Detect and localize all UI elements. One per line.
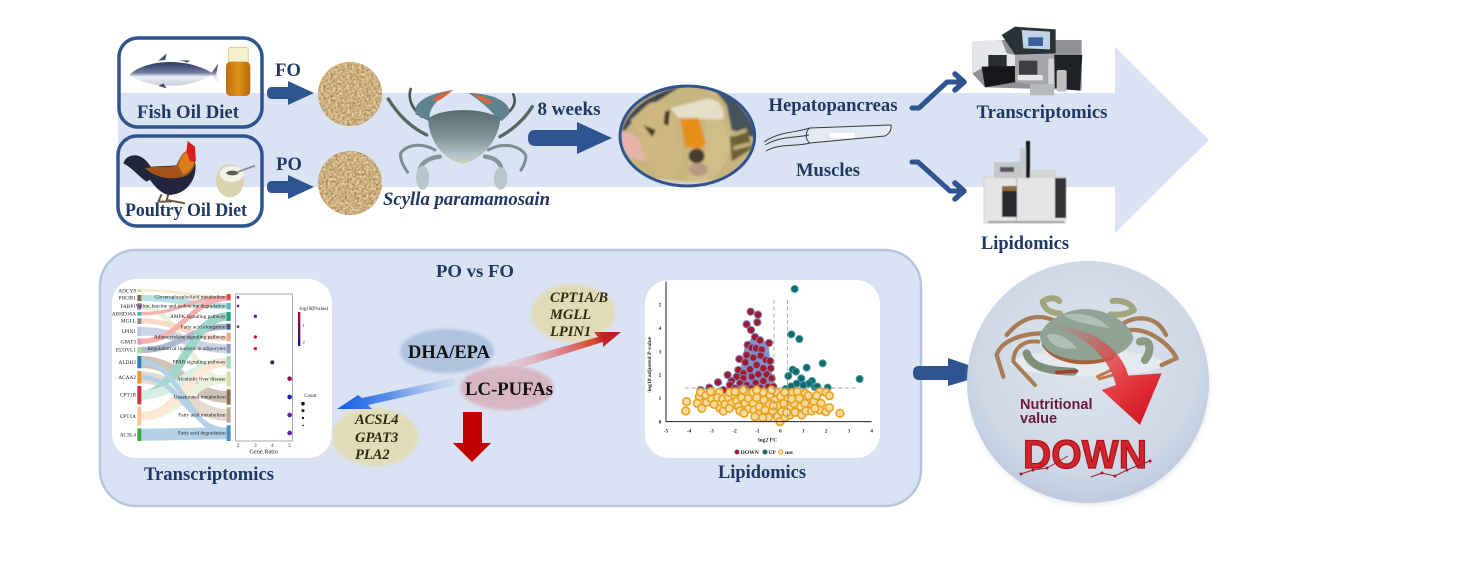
chart: sankey diagram: PPAR signaling pathway — [173, 360, 226, 366]
chart: volcano plot: -5 — [664, 429, 669, 434]
legend: volcano categories: UP — [768, 450, 776, 456]
icon: mass spectrometer — [984, 141, 1066, 223]
label: DOWN: DOWN — [1023, 433, 1147, 477]
arrow: to transcriptomics — [912, 74, 964, 108]
ellipse: down-regulated genes — [332, 408, 418, 466]
chart: sankey diagram: Fatty acid elongation — [181, 324, 226, 330]
legend: volcano categories — [735, 450, 793, 456]
chart: volcano plot: 4 — [870, 429, 873, 434]
chart: volcano plot: -1 — [755, 429, 760, 434]
chart: gene ratio dot plot: 5 — [288, 444, 291, 449]
decorative trend line — [1020, 456, 1152, 478]
chart: volcano plot: -2 — [733, 429, 737, 434]
chart: volcano plot: 4 — [659, 327, 662, 332]
chart: sankey diagram: ACAA2 — [118, 375, 136, 381]
chart: volcano plot: 0 — [779, 429, 782, 434]
icon: fish — [129, 53, 218, 88]
label: transcriptomics: Transcriptomics — [976, 102, 1108, 123]
big background arrow — [118, 47, 1209, 233]
chart: volcano plot: 3 — [659, 350, 662, 355]
label: fish oil diet: Fish Oil Diet — [137, 102, 240, 123]
ellipse: DHA/EPA: DHA/EPA — [408, 342, 490, 363]
chart: sankey diagram: Glycerophospholipid metabolism — [154, 295, 227, 301]
label: nutritional value: value — [1020, 411, 1057, 427]
chart: gene ratio dot plot: 1 — [303, 323, 305, 328]
arrow: to nutritional value result — [913, 358, 992, 386]
ellipse: down-regulated genes: ACSL4 — [354, 412, 399, 428]
ellipse: down-regulated genes: GPAT3 — [355, 430, 398, 446]
icon: fish oil feed pellets — [318, 62, 382, 126]
arrow: LC-PUFAs decrease — [453, 412, 491, 462]
icon: fish oil bottle — [226, 47, 250, 96]
chart: sankey diagram: LPIN1 — [121, 329, 136, 335]
icon: mud crab — [388, 89, 532, 190]
panel: PO vs FO comparison — [100, 250, 921, 506]
chart: volcano plot: 0 — [659, 420, 662, 425]
chart: gene ratio dot plot: 4 — [271, 444, 274, 449]
label: lipidomics: Lipidomics — [981, 233, 1069, 254]
points: up-regulated — [782, 285, 863, 392]
arrow: FO to feed — [267, 81, 314, 105]
chart: gene ratio dot plot — [236, 294, 329, 456]
ellipse: LC-PUFAs — [460, 366, 554, 410]
arrow: red upward to up-regulated genes — [505, 332, 621, 371]
chart: sankey diagram: Valine, leucine and isoleucine degradation — [136, 303, 226, 309]
ellipse: LC-PUFAs: LC-PUFAs — [465, 379, 553, 400]
ellipse: down-regulated genes: PLA2 — [355, 447, 390, 463]
chart: gene ratio dot plot: Count — [304, 394, 317, 399]
chart: sankey diagram: Unsaturated metabolism — [174, 394, 227, 400]
chart: gene ratio dot plot: 2 — [303, 340, 305, 345]
chart: volcano plot: 3 — [848, 429, 851, 434]
chart: sankey diagram: Alcoholic liver disease — [177, 376, 226, 382]
chart: sankey diagram: Fatty acid degradation — [178, 430, 226, 436]
heading: PO vs FO: PO vs FO — [436, 261, 514, 281]
legend: volcano categories: not — [785, 450, 793, 456]
chart: volcano plot: 2 — [659, 374, 662, 379]
chart: sankey diagram: ALDH2 — [119, 360, 136, 366]
card: lipidomics volcano plot — [645, 280, 880, 458]
chart: gene ratio dot plot: 2 — [237, 444, 240, 449]
chart: gene ratio dot plot: -log10(Pvalue) — [298, 307, 329, 312]
label: nutritional value — [1020, 397, 1092, 427]
chart: sankey diagram: ACSL4 — [120, 432, 136, 438]
icon: crab with red arrow — [997, 298, 1177, 425]
label: lipidomics: Lipidomics — [718, 462, 806, 483]
icon: sequencing instrument — [972, 27, 1082, 95]
points: down-regulated — [697, 308, 777, 394]
chart: volcano plot: 5 — [659, 304, 662, 309]
ellipse: up-regulated genes: MGLL — [549, 307, 591, 323]
chart: sankey diagram: Adipocytokine signaling pathway — [154, 335, 226, 341]
chart: sankey diagram: FABP1 — [120, 304, 136, 310]
arrow: blue downward to down-regulated genes — [337, 378, 458, 409]
chart: volcano plot: -4 — [687, 429, 692, 434]
icon: poultry oil bowl — [216, 164, 255, 197]
chart: volcano plot: 2 — [825, 429, 828, 434]
chart: sankey diagram: CPT1B — [120, 393, 136, 399]
label: muscles: Muscles — [796, 160, 860, 181]
chart: sankey diagram: PIK3R1 — [119, 296, 136, 302]
label: hepatopancreas: Hepatopancreas — [768, 95, 898, 116]
chart: volcano plot: 1 — [802, 429, 805, 434]
chart: sankey diagram: ADCY9 — [118, 288, 136, 294]
chart: sankey diagram: GPAT3 — [120, 339, 136, 345]
panel: fish oil diet — [119, 38, 262, 127]
label: poultry oil diet: Poultry Oil Diet — [125, 201, 248, 221]
points: not significant — [682, 386, 844, 425]
label: species name: Scylla paramamosain — [383, 189, 550, 210]
card: transcriptomics sankey and dot plot — [112, 279, 332, 458]
arrow: PO to feed — [267, 175, 314, 199]
icon: rooster — [123, 141, 196, 203]
label: nutritional value: Nutritional — [1020, 397, 1092, 413]
chart: volcano plot: 1 — [659, 397, 662, 402]
chart: sankey diagram — [112, 288, 231, 441]
chart: volcano plot: log2 FC — [758, 437, 777, 443]
chart: gene ratio dot plot: 3 — [254, 444, 257, 449]
chart: sankey diagram: ELOVL1 — [116, 348, 136, 354]
panel: poultry oil diet — [118, 136, 262, 226]
chart: sankey diagram: MGLL — [121, 319, 136, 325]
chart: sankey diagram: Fatty acid metabolism — [178, 412, 227, 418]
legend: volcano categories: DOWN — [741, 450, 760, 456]
ellipse: up-regulated genes: LPIN1 — [549, 324, 591, 340]
chart: volcano plot: -3 — [710, 429, 714, 434]
chart: volcano plot: -log10 adjusted P-value — [647, 336, 653, 393]
chart: gene ratio dot plot: Gene.Ratio — [249, 449, 278, 456]
ellipse: DHA/EPA — [400, 329, 494, 373]
ellipse: up-regulated genes — [531, 284, 615, 342]
chart: sankey diagram: Regulation of lipolysis in adipocytes — [148, 345, 226, 352]
chart: volcano plot — [647, 282, 873, 456]
circle: nutritional value down — [967, 261, 1209, 505]
label: 8 weeks: 8 weeks — [538, 100, 600, 120]
photo: dissected crab — [618, 84, 756, 188]
icon: poultry oil feed pellets — [318, 151, 382, 215]
label: PO: PO — [276, 155, 302, 175]
arrow: to lipidomics — [912, 162, 964, 199]
chart: sankey diagram: ABHD16A — [112, 312, 136, 318]
label: transcriptomics: Transcriptomics — [144, 464, 274, 485]
chart: sankey diagram: CPT1A — [120, 414, 136, 420]
arrow: 8 weeks — [528, 122, 612, 154]
label: FO: FO — [275, 61, 301, 81]
chart: sankey diagram: AMPK signaling pathway — [170, 314, 226, 320]
icon: tweezers — [764, 125, 891, 151]
ellipse: up-regulated genes: CPT1A/B — [550, 290, 608, 306]
